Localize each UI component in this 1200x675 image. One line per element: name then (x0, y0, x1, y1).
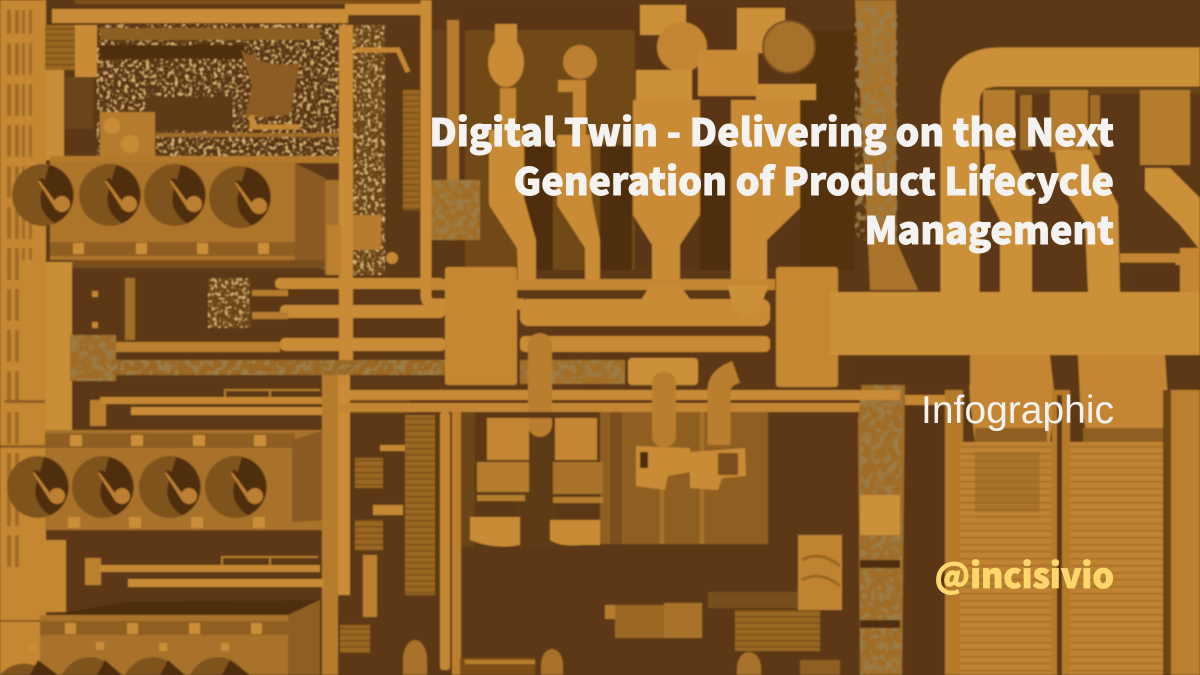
title: Generation of Product Lifecycle (514, 151, 1114, 206)
handle: @incisivio (935, 549, 1114, 598)
title: Management (864, 200, 1114, 255)
tall noisy column (855, 0, 918, 675)
horizontal pipes at centre with T-joints (430, 279, 775, 326)
top rail pipes (45, 0, 430, 129)
mid pipes and noisy insulated pipe (340, 336, 865, 412)
separators and small pipe at left of centre (424, 0, 524, 304)
subtitle: Infographic (921, 389, 1114, 432)
fan unit 3 (partly cropped) (0, 600, 320, 675)
central dark backdrop panels (462, 5, 855, 270)
side pipes in front of column (838, 390, 945, 675)
large insulated duct loop top right (960, 67, 1200, 292)
title (429, 102, 1114, 255)
hopper equipment blocks left of panels (470, 418, 603, 547)
vertical twin pipes (440, 412, 535, 675)
floor boxes and containers (403, 535, 842, 675)
manifold branches (850, 355, 1168, 442)
vertical capsule pipe (528, 333, 552, 437)
top machinery noise block (97, 24, 345, 156)
lower vertical structure and stairs (322, 375, 435, 675)
valve blocks under the duct (983, 90, 1190, 165)
fan unit 1 (12, 156, 346, 270)
diagonal ducts descending to main manifold (985, 150, 1200, 292)
lower-centre mid panels (460, 412, 768, 547)
title: Digital Twin - Delivering on the Next (429, 102, 1114, 157)
junction boxes (445, 267, 838, 387)
main horizontal manifold duct (830, 292, 1200, 355)
left building wall with windows (0, 0, 72, 675)
main vertical pipe and adjoining machinery (325, 25, 420, 370)
two bent pipes with pump housings (636, 372, 746, 490)
rails above fan unit 3 (85, 557, 323, 587)
fan unit 2 (7, 430, 325, 530)
rails above fan unit 2 (90, 390, 410, 426)
left mid pipe group (70, 278, 450, 381)
shutter panels (945, 390, 1200, 675)
four vertical vessels with hoppers (488, 5, 816, 292)
